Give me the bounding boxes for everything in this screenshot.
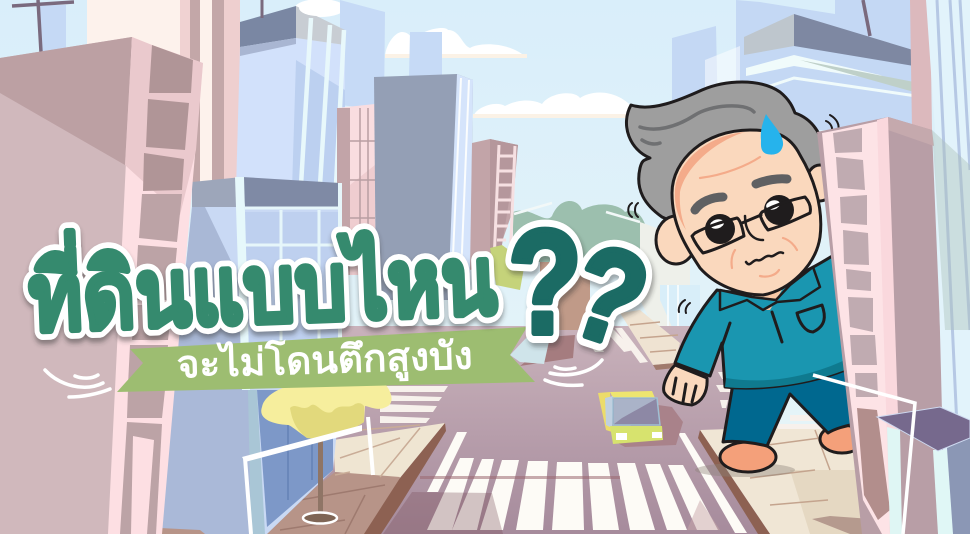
eyes	[705, 214, 735, 244]
building: pink mid	[337, 104, 377, 275]
glass frame	[242, 417, 373, 534]
shake marks	[628, 115, 839, 313]
building: grey tower	[374, 74, 473, 300]
car	[598, 391, 683, 447]
shake lines right	[545, 360, 602, 385]
distant buildings	[340, 0, 932, 130]
wires and traffic signal	[440, 203, 640, 266]
street tree and glass frame	[242, 384, 392, 534]
tree canopy	[261, 384, 392, 438]
shirt	[675, 250, 845, 388]
building: small pink tower	[470, 139, 518, 270]
right shoe	[820, 425, 864, 453]
far street features	[490, 245, 590, 366]
banner	[117, 327, 535, 392]
question marks	[508, 198, 667, 380]
right crossing behind legs	[716, 372, 833, 429]
right ear	[806, 165, 834, 201]
character	[626, 82, 864, 472]
second question mark: ?	[554, 215, 665, 376]
first question mark: ?	[508, 198, 582, 365]
neck	[750, 290, 782, 310]
main crosswalk	[427, 432, 747, 533]
eyebrows	[695, 197, 723, 210]
left ear	[656, 216, 696, 264]
crosswalk shadows	[383, 476, 720, 534]
hand	[664, 365, 707, 405]
pale building behind the character	[640, 222, 700, 345]
glasses	[692, 197, 810, 253]
hair	[626, 82, 828, 225]
first question mark: ?	[508, 198, 582, 365]
building: centre glass block	[160, 177, 340, 534]
building: far right glass tower	[926, 0, 970, 534]
mouth	[746, 252, 783, 264]
first question mark: ?	[510, 202, 584, 369]
wrinkles	[700, 157, 797, 277]
subtitle: จะไม่โดนตึกสูงบัง	[176, 332, 473, 389]
glass shelter, right foreground	[813, 375, 970, 534]
second question mark: ?	[556, 219, 667, 380]
nose	[745, 216, 763, 240]
building: blue tower	[236, 0, 345, 190]
road	[0, 326, 800, 534]
tree trunk	[318, 438, 323, 514]
left sidewalk	[262, 423, 446, 534]
far crossing stripes	[380, 328, 648, 423]
sweat drop	[761, 114, 783, 155]
building: large left block	[0, 37, 203, 534]
building: right front block	[817, 117, 952, 534]
trousers	[723, 370, 855, 446]
title: ที่ดินแบบไหน	[26, 213, 499, 352]
shake lines left	[45, 370, 110, 397]
face	[672, 130, 821, 295]
tree base	[303, 512, 337, 524]
far sidewalk right	[620, 310, 680, 370]
second question mark: ?	[554, 215, 665, 376]
shirt pocket	[797, 305, 824, 332]
right sidewalk	[695, 425, 890, 534]
left shoe	[720, 442, 776, 472]
clouds	[295, 0, 640, 118]
title: ที่ดินแบบไหน	[26, 217, 499, 356]
distant trees	[513, 201, 652, 262]
collar	[720, 267, 820, 310]
building: top left cream tower	[12, 0, 240, 190]
title: ที่ดินแบบไหน	[26, 213, 499, 352]
